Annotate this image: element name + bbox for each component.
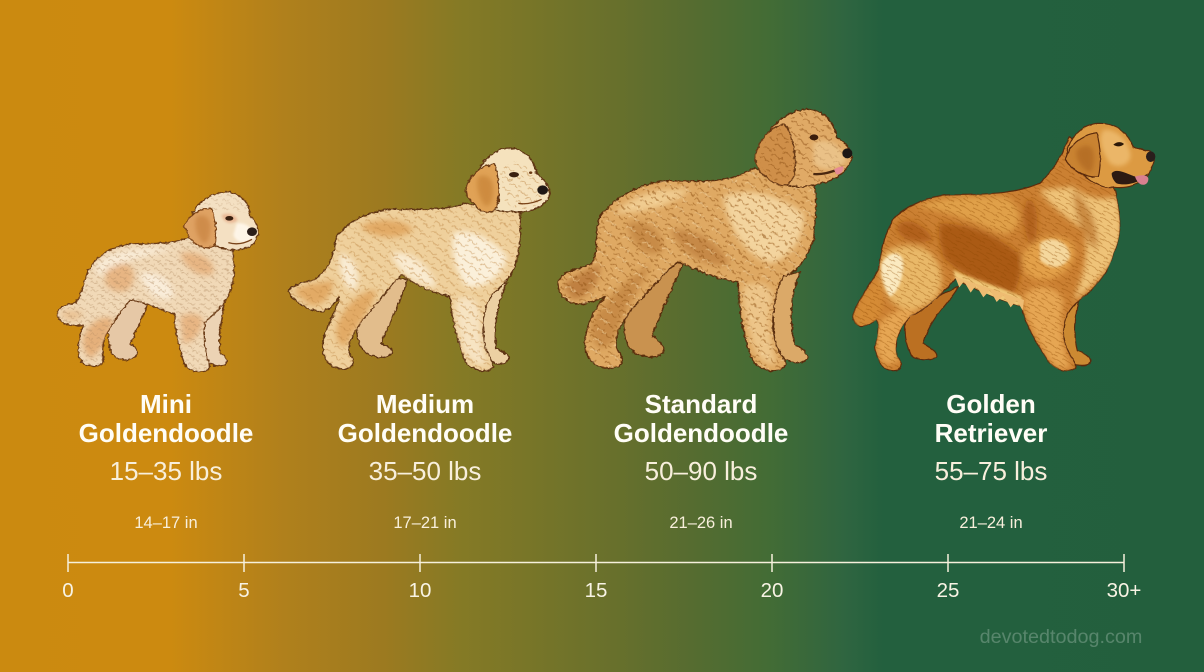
scale axis	[62, 554, 1141, 602]
label: standard goldendoodle	[614, 389, 788, 532]
label: mini goldendoodle: Goldendoodle	[79, 418, 253, 448]
label: medium goldendoodle: 35–50 lbs	[369, 456, 481, 486]
belly feathering	[955, 277, 1024, 311]
label: golden retriever	[935, 389, 1047, 532]
label: standard goldendoodle: 21–26 in	[669, 514, 733, 532]
label: standard goldendoodle: Standard	[645, 389, 757, 419]
label: mini goldendoodle: 14–17 in	[134, 514, 198, 532]
icon: mini goldendoodle	[53, 192, 258, 373]
scale axis: 30+	[1107, 579, 1141, 602]
scale axis: 10	[409, 579, 431, 602]
label: mini goldendoodle: 15–35 lbs	[110, 456, 222, 486]
label: standard goldendoodle: Goldendoodle	[614, 418, 788, 448]
label: golden retriever: 55–75 lbs	[935, 456, 1047, 486]
label: mini goldendoodle: Mini	[140, 389, 192, 419]
label: golden retriever: 21–24 in	[959, 514, 1023, 532]
scale axis: 20	[761, 579, 783, 602]
icon: medium goldendoodle	[280, 148, 550, 377]
label: medium goldendoodle: 17–21 in	[393, 514, 457, 532]
label: mini goldendoodle	[79, 389, 253, 532]
icon: standard goldendoodle	[550, 109, 852, 377]
icon: golden retriever	[840, 123, 1155, 377]
scale axis: 5	[238, 579, 250, 602]
watermark: devotedtodog.com	[980, 626, 1142, 648]
label: golden retriever: Golden	[946, 389, 1036, 419]
label: medium goldendoodle	[338, 389, 512, 532]
scale axis: 0	[62, 579, 74, 602]
label: medium goldendoodle: Medium	[376, 389, 474, 419]
label: medium goldendoodle: Goldendoodle	[338, 418, 512, 448]
label: golden retriever: Retriever	[935, 418, 1047, 448]
label: standard goldendoodle: 50–90 lbs	[645, 456, 757, 486]
scale axis: 25	[937, 579, 959, 602]
scale axis: 15	[585, 579, 607, 602]
